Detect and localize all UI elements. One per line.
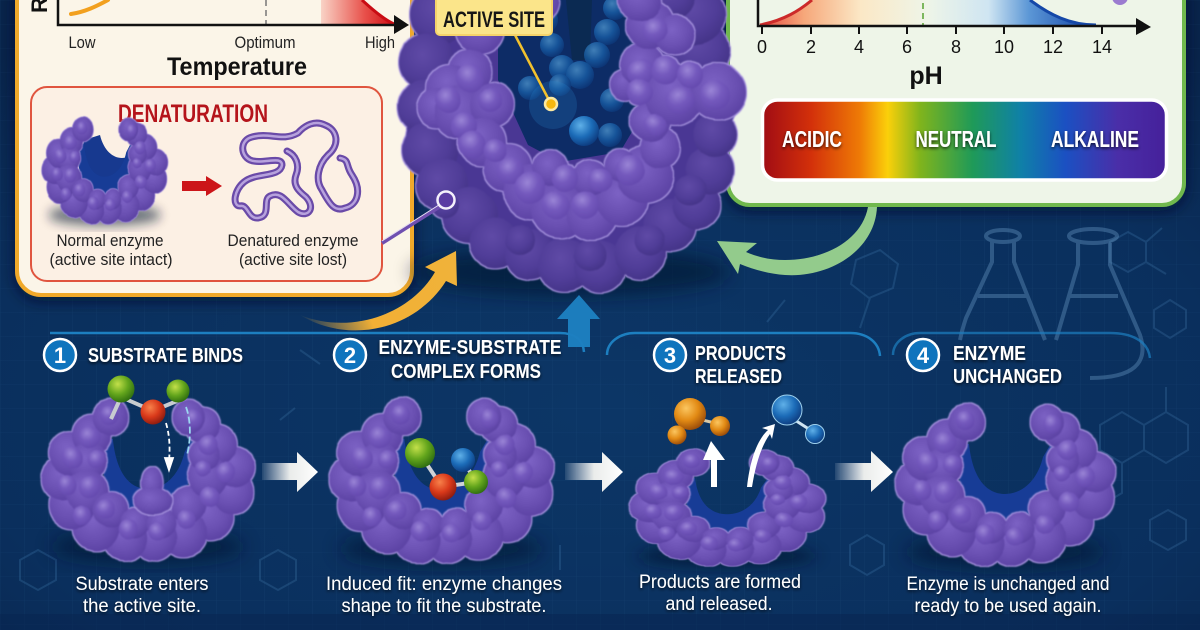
step 4 title: ENZYME [953, 343, 1026, 365]
enzyme 4 [895, 403, 1115, 568]
step 1: substrate binds [41, 339, 254, 617]
badge 3 [654, 339, 686, 371]
background molecule decoration [20, 228, 1188, 590]
step 2 title: COMPLEX FORMS [391, 361, 541, 383]
arrow: cycle up to enzyme [557, 295, 600, 347]
axis title: temperature: Temperature [167, 53, 307, 81]
step 4: enzyme unchanged [895, 339, 1115, 617]
step 1 title: SUBSTRATE BINDS [88, 345, 243, 367]
complex molecule [405, 438, 488, 500]
step 2: enzyme-substrate complex [326, 337, 562, 617]
step 1 caption: Substrate enters [76, 574, 208, 595]
panel: pH effect [728, 0, 1184, 205]
pH chart: 10 [994, 37, 1014, 57]
arrow: step 3 to 4 [835, 451, 893, 492]
pH scale bar: ACIDIC [782, 126, 842, 152]
enzyme 3 [629, 449, 825, 568]
substrate molecule [108, 376, 190, 424]
arrow: step 2 to 3 [565, 452, 623, 492]
step 2 caption: Induced fit: enzyme changes [326, 574, 562, 595]
pH chart: 2 [806, 37, 816, 57]
caption: normal enzyme: (active site intact) [50, 250, 172, 269]
step 3 title: RELEASED [695, 366, 782, 388]
callout: active site: ACTIVE SITE [443, 7, 545, 32]
pH scale bar: ALKALINE [1051, 126, 1139, 152]
caption: denatured enzyme: Denatured enzyme [228, 231, 358, 250]
icon: normal enzyme [42, 117, 167, 226]
active site pocket [498, 0, 642, 162]
pH chart [757, 0, 1151, 57]
caption: denatured enzyme: (active site lost) [239, 250, 347, 269]
pH chart: 0 [757, 37, 767, 57]
arrow: denaturation [182, 176, 222, 196]
step 3: products released [629, 339, 825, 615]
step 3 title: PRODUCTS [695, 343, 786, 365]
pH scale bar: NEUTRAL [916, 126, 996, 152]
badge 3: 3 [664, 343, 676, 368]
arrow: step 1 to 2 [262, 452, 318, 492]
badge 1: 1 [54, 343, 66, 368]
panel outlines for steps [50, 333, 1150, 358]
step 2 caption: shape to fit the substrate. [342, 596, 546, 617]
enzyme front lobe [417, 0, 746, 240]
enzyme 2 [329, 397, 553, 565]
pH chart: 8 [951, 37, 961, 57]
step 1 caption: the active site. [83, 596, 201, 617]
pH chart: 4 [854, 37, 864, 57]
step 4 caption: Enzyme is unchanged and [906, 574, 1110, 595]
badge 2: 2 [344, 343, 356, 368]
panel: denaturation [31, 87, 382, 281]
badge 4 [907, 339, 939, 371]
enzyme 1 [41, 398, 254, 563]
binding arrows [165, 407, 190, 470]
badge 2 [334, 339, 366, 371]
heading: denaturation: DENATURATION [118, 100, 268, 128]
product molecules [668, 395, 824, 444]
pH chart: 6 [902, 37, 912, 57]
enzyme back layer [398, 0, 737, 293]
step 2 title: ENZYME-SUBSTRATE [378, 337, 562, 359]
caption: normal enzyme: Normal enzyme [56, 231, 164, 250]
axis title: pH: pH [909, 62, 943, 90]
main enzyme [398, 0, 746, 296]
step 3 caption: Products are formed [639, 572, 801, 593]
arrow: temperature to enzyme [300, 251, 457, 330]
lab flasks [960, 229, 1143, 378]
badge 1 [44, 339, 76, 371]
pH scale bar [762, 100, 1166, 180]
arrow: pH to enzyme [717, 207, 877, 275]
temperature chart: Low [68, 33, 96, 52]
icon: denatured enzyme [235, 123, 358, 218]
badge 4: 4 [917, 343, 930, 368]
panel: temperature effect [17, 0, 412, 295]
pH chart: 12 [1043, 37, 1063, 57]
connector: denaturation to enzyme [382, 192, 454, 243]
step 4 caption: ready to be used again. [914, 596, 1102, 617]
temperature chart: Optimum [234, 33, 296, 52]
callout: active site [436, 0, 557, 110]
pH chart: 14 [1092, 37, 1112, 57]
step 4 title: UNCHANGED [953, 366, 1062, 388]
step 3 caption: and released. [666, 594, 772, 615]
temperature chart: High [365, 33, 395, 52]
temperature chart [27, 0, 409, 52]
release arrows [703, 424, 775, 487]
